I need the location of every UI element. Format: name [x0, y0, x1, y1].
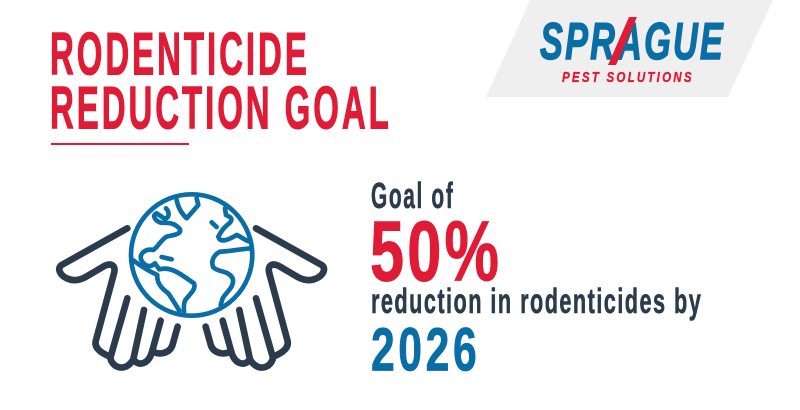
- title: REDUCTION GOAL: [50, 75, 389, 142]
- text: goal of: Goal of: [371, 176, 453, 217]
- title: RODENTICIDE: [50, 21, 307, 88]
- icon: hands holding globe: [59, 194, 324, 368]
- left hand: [59, 228, 178, 368]
- logo: Sprague Pest Solutions: PEST SOLUTIONS: [562, 69, 692, 85]
- right hand: [206, 228, 324, 368]
- text: reduction in rodenticides by: reduction in rodenticides by: [371, 283, 701, 321]
- text: 50%: 50%: [370, 204, 499, 299]
- logo: Sprague Pest Solutions: [486, 0, 773, 97]
- text: 2026: 2026: [371, 316, 477, 384]
- title: [50, 21, 389, 142]
- title underline: [51, 143, 189, 145]
- logo: Sprague Pest Solutions: SPRAGUE: [540, 13, 724, 71]
- globe: [131, 194, 253, 316]
